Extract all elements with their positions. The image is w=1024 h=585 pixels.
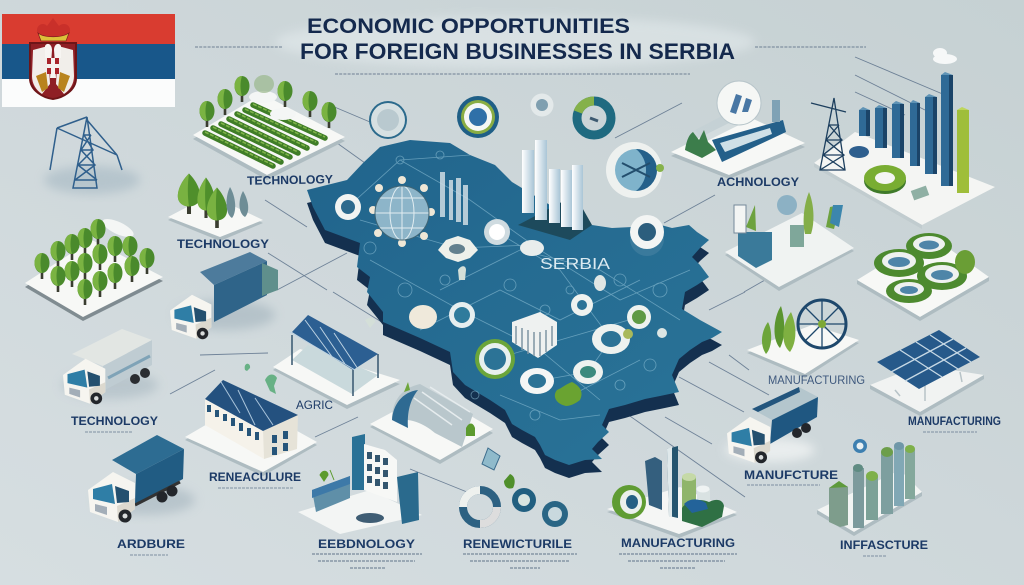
- title: [300, 15, 735, 64]
- label: eebdnology: EEBDNOLOGY: [318, 537, 415, 551]
- subtitle filler text: [195, 47, 866, 74]
- title: ECONOMIC OPPORTUNITIES: [307, 15, 630, 38]
- bars: [859, 72, 969, 193]
- icon: small pale badge: [530, 94, 554, 116]
- panel: solar array: [870, 330, 984, 416]
- icon: circle group renewable: [463, 448, 568, 527]
- panel: manufacturing plant: [607, 446, 737, 538]
- caption dashes: [863, 555, 887, 557]
- caption dashes: [619, 554, 737, 568]
- map network lines: [348, 151, 690, 420]
- panel: dome hangar: [370, 382, 493, 464]
- icon: blue truck: [88, 435, 195, 522]
- white tower buildings: [518, 140, 592, 240]
- icon: silver truck: [62, 329, 158, 404]
- label: Serbia on map: SERBIA: [540, 256, 610, 273]
- label: agriculture fragment: AGRIC: [296, 398, 333, 412]
- panel: green rings: [857, 233, 989, 321]
- panel: chart report: [811, 72, 995, 229]
- label: achnology: ACHNOLOGY: [717, 175, 799, 189]
- caption dashes: [218, 487, 293, 489]
- caption dashes: [747, 484, 820, 486]
- coat of arms: [30, 18, 76, 99]
- flag of Serbia: [2, 14, 175, 107]
- icon: power pylon left: [44, 117, 140, 194]
- connector lines: [170, 57, 945, 497]
- panel: crop field: [193, 75, 345, 180]
- label: renewable culture: RENEWICTURILE: [463, 537, 572, 551]
- panel: technology platform: [671, 81, 805, 179]
- caption dashes: [312, 554, 422, 568]
- icon: cloud top right: [933, 48, 957, 64]
- label: infrastructure: INFFASCTURE: [840, 538, 928, 552]
- panel: factory platform: [725, 192, 854, 291]
- icon: gear dial: [606, 142, 664, 198]
- pale bar chart on map: [440, 172, 468, 225]
- label: renenculure: RENEACULURE: [209, 470, 301, 484]
- title: FOR FOREIGN BUSINESSES IN SERBIA: [300, 39, 735, 64]
- panel: wheel and leaves: [747, 300, 859, 378]
- panel: solar roof building: [185, 364, 317, 476]
- label: manufacturing: MANUFACTURING: [621, 536, 735, 550]
- panel: solar pavilion: [273, 315, 400, 409]
- label: technology: TECHNOLOGY: [71, 414, 158, 428]
- label: manufacturing: MANUFACTURING: [768, 373, 865, 387]
- icon: badge on map edge: [630, 215, 664, 256]
- caption dashes: [85, 431, 133, 433]
- caption dashes: [923, 431, 977, 433]
- globe: [369, 176, 435, 247]
- label: manufacturing: MANUFACTURING: [908, 414, 1001, 428]
- icon: truck centre left: [170, 252, 278, 339]
- caption dashes: [130, 554, 168, 556]
- label: technology: TECHNOLOGY: [177, 237, 269, 251]
- caption dashes: [463, 554, 577, 568]
- icon: arrow badge: [457, 96, 499, 138]
- label: ardlure: ARDBURE: [117, 537, 185, 551]
- icon: pale data badge: [369, 101, 407, 139]
- panel: tree orchard: [25, 215, 163, 321]
- map of Serbia: [307, 140, 722, 478]
- label: manufacture: MANUFCTURE: [744, 468, 838, 482]
- panel: office block: [298, 434, 422, 534]
- panel: forest plot: [168, 174, 263, 241]
- label: technology: TECHNOLOGY: [247, 172, 333, 188]
- title glow: [275, 16, 755, 68]
- white factory on map: [512, 312, 557, 358]
- icon: dump truck: [725, 387, 818, 463]
- gear icon: [438, 236, 478, 262]
- badges on map: [335, 194, 667, 406]
- icon: donut chart: [577, 101, 611, 135]
- pylon in chart: [811, 98, 846, 170]
- panel: infrastructure towers: [817, 439, 922, 536]
